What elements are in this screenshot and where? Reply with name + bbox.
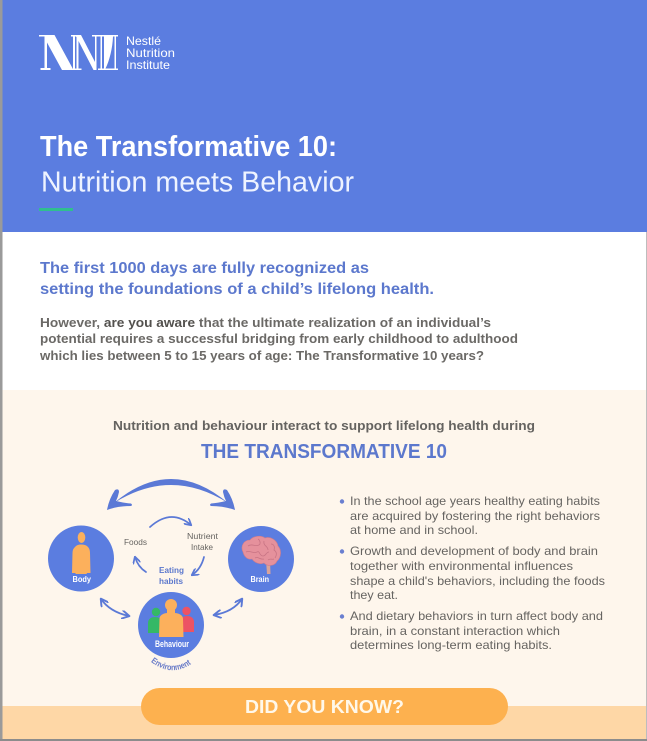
- panel: nutrition and behaviour: [2, 390, 646, 706]
- intro paragraph: potential requires a successful bridging from early childhood to adulthood: [40, 332, 518, 346]
- section heading: THE TRANSFORMATIVE 10: [201, 440, 447, 463]
- logo wordmark: Institute: [126, 58, 170, 72]
- label: eating habits: [159, 565, 184, 586]
- label: environment: Environment: [151, 657, 192, 670]
- arrow: big double-headed arc: [107, 479, 235, 510]
- icon: brain: [242, 536, 281, 574]
- bullet: growth and development: Growth and development of body and brain: [350, 544, 598, 558]
- arrows: body, behaviour and brain links: [101, 599, 242, 616]
- label: eating habits: Eating: [159, 565, 184, 575]
- arrows: eating habits cycle: [135, 517, 204, 575]
- bullet: growth and development: shape a child's behaviors, including the foods: [350, 574, 605, 588]
- intro heading: The first 1000 days are fully recognized as: [40, 260, 369, 277]
- bullet: school age: In the school age years healthy eating habits: [350, 494, 600, 508]
- bullet: growth and development: together with environmental influences: [350, 559, 573, 573]
- diagram: nutrition behaviour cycle: [48, 479, 294, 670]
- bullet: dietary behaviors: And dietary behaviors in turn affect body and: [350, 609, 603, 623]
- bullet: dietary behaviors: [340, 609, 603, 652]
- logo wordmark: Nestlé: [126, 34, 161, 48]
- labels: cycle steps: Nutrient: [187, 531, 219, 541]
- logo wordmark: Nutrition: [126, 46, 175, 60]
- bullet: school age: at home and in school.: [350, 523, 478, 537]
- panel: introduction: [39, 260, 518, 363]
- bullet: growth and development: [340, 544, 605, 602]
- labels: cycle steps: Intake: [191, 542, 213, 552]
- bullet: dietary behaviors: determines long-term eating habits.: [350, 638, 552, 652]
- logo: Nestlé Nutrition Institute: [39, 34, 175, 72]
- button pill: [141, 688, 508, 725]
- title: Nutrition meets Behavior: [41, 166, 355, 198]
- band: did you know: [0, 688, 647, 739]
- icon: child figure: [72, 532, 90, 574]
- circle: brain: [228, 526, 294, 592]
- bullet list: [340, 494, 605, 652]
- intro paragraph: However, are you aware that the ultimate realization of an individual’s: [40, 316, 491, 330]
- section lead-in: Nutrition and behaviour interact to support lifelong health during: [113, 418, 535, 433]
- title: The Transformative 10:: [40, 131, 337, 163]
- circle: behaviour: [138, 592, 204, 658]
- intro heading: [40, 260, 434, 298]
- circle: body: [48, 526, 114, 592]
- green accent bar: [39, 208, 73, 211]
- intro paragraph: which lies between 5 to 15 years of age: The Transformative 10 years?: [39, 349, 484, 363]
- logo wordmark: [126, 34, 175, 72]
- bullet: school age: are acquired by fostering the right behaviors: [350, 509, 600, 523]
- label: brain: Brain: [250, 575, 269, 584]
- icon: group of people: [148, 599, 194, 637]
- label: body: Body: [72, 575, 92, 584]
- labels: cycle steps: [124, 531, 219, 552]
- label: behaviour: Behaviour: [155, 639, 189, 649]
- button label: DID YOU KNOW?: [245, 696, 404, 717]
- panel: blue header: [0, 0, 647, 232]
- intro paragraph: [39, 316, 518, 363]
- labels: cycle steps: Foods: [124, 537, 147, 547]
- bullet: growth and development: they eat.: [350, 588, 398, 602]
- intro heading: setting the foundations of a child’s lifelong health.: [40, 281, 434, 298]
- label: eating habits: habits: [159, 576, 183, 586]
- title: [40, 131, 355, 198]
- bullet: dietary behaviors: brain, in a constant interaction which: [350, 624, 560, 638]
- bullet: school age: [340, 494, 600, 537]
